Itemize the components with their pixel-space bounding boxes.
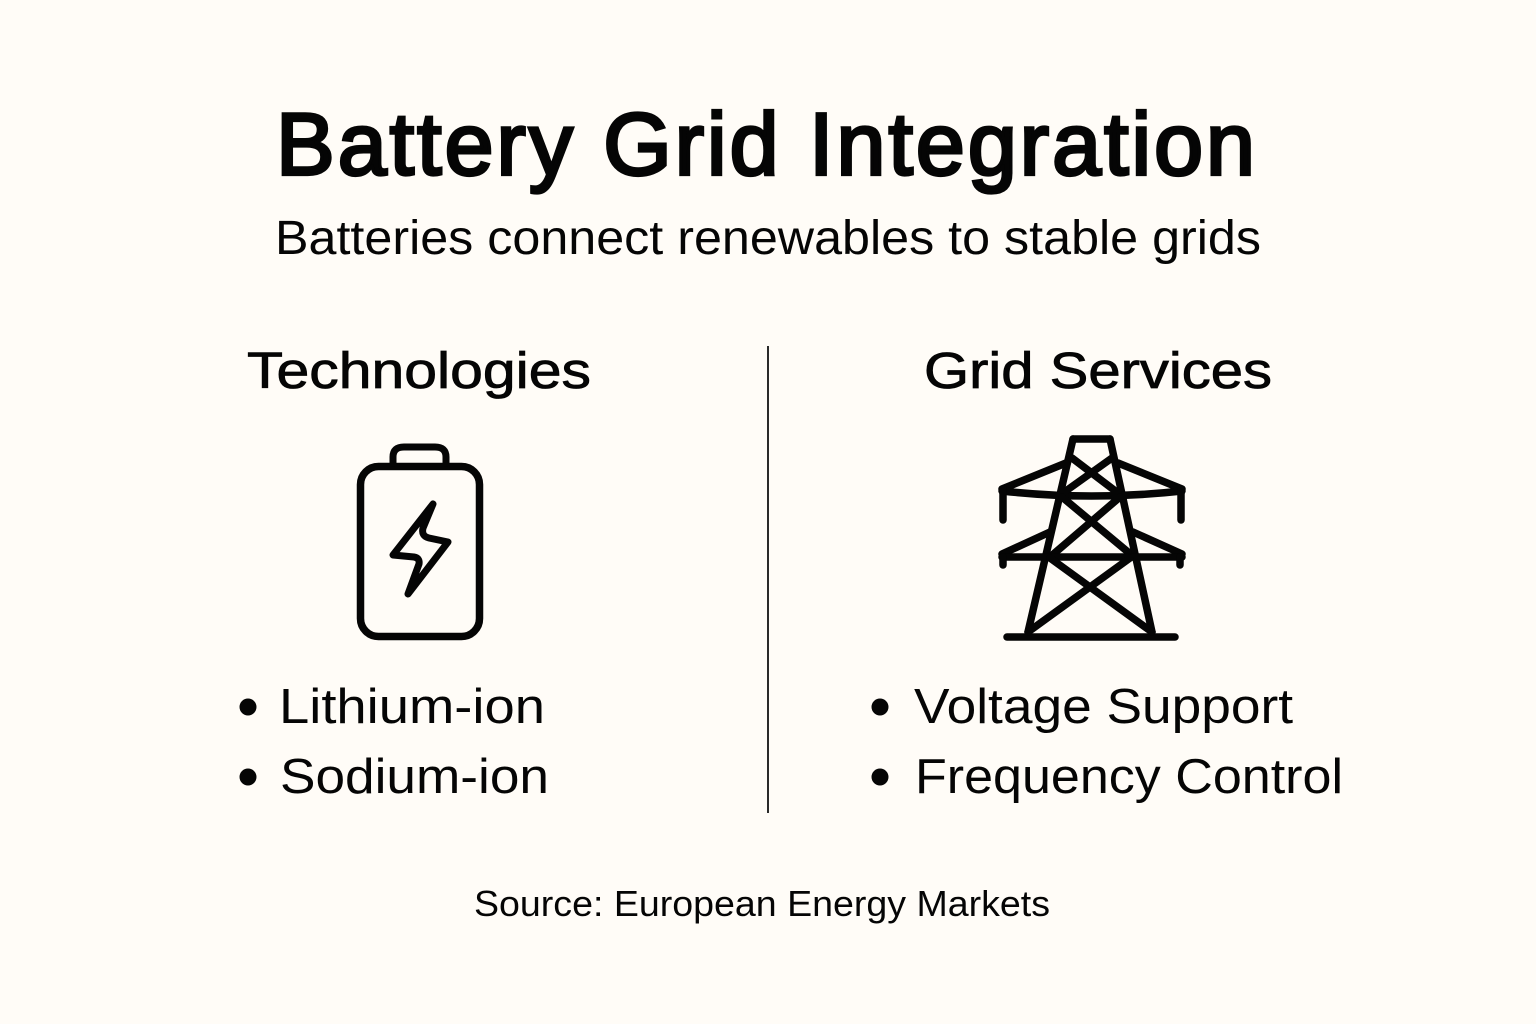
panel: grid services bbox=[872, 342, 1343, 804]
list: grid service types bbox=[872, 680, 1343, 804]
list: grid service types: Frequency Control bbox=[915, 750, 1343, 804]
panel: technologies bbox=[240, 342, 591, 804]
subtitle: Batteries connect renewables to stable grids bbox=[275, 212, 1261, 265]
list: technology types: Lithium-ion bbox=[279, 680, 545, 734]
icon: transmission tower bbox=[1002, 439, 1182, 637]
heading: grid services: Grid Services bbox=[924, 342, 1272, 399]
icon: battery with lightning bolt bbox=[360, 447, 480, 636]
title: Battery Grid Integration bbox=[276, 94, 1255, 194]
list: technology types bbox=[240, 680, 549, 804]
source note: Source: European Energy Markets bbox=[474, 883, 1050, 924]
heading: technologies: Technologies bbox=[247, 342, 591, 399]
list: grid service types: Voltage Support bbox=[914, 680, 1293, 734]
list: technology types: Sodium-ion bbox=[280, 750, 549, 804]
